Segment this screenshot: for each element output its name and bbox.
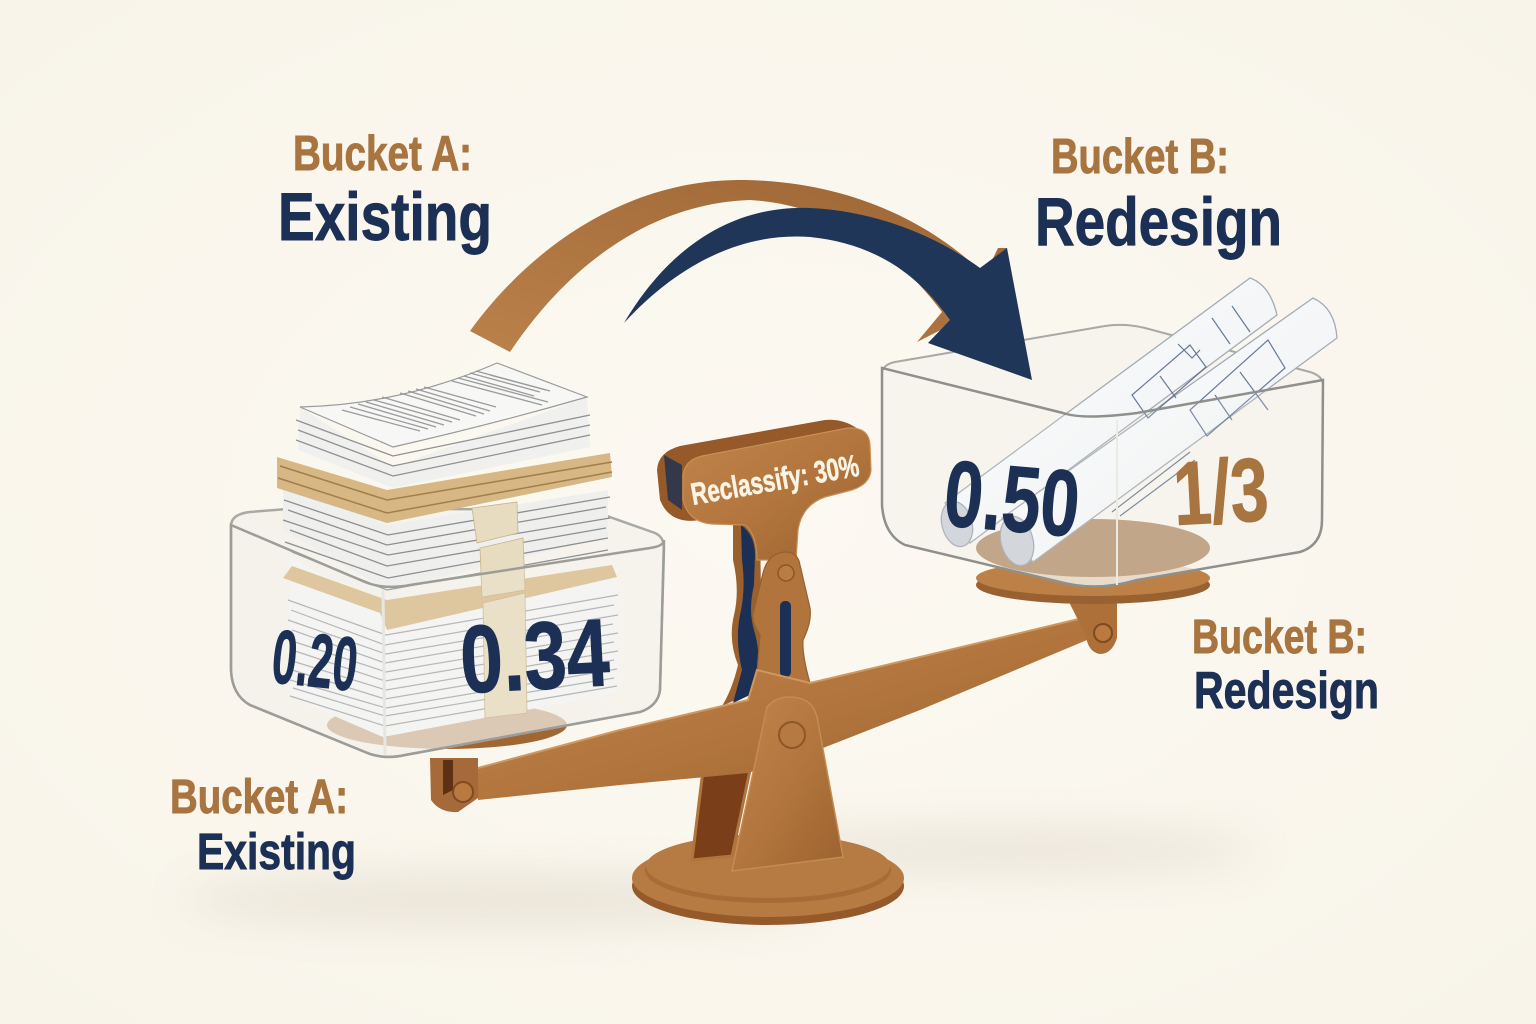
value: 0.34: 0.34 — [457, 599, 612, 714]
heading: Bucket B Redesign: Bucket B: — [1051, 130, 1229, 184]
scale — [430, 420, 1117, 925]
right pan — [976, 560, 1210, 604]
scale beam — [478, 617, 1087, 800]
label: Reclassify 30%: Reclassify: 30% — [688, 448, 862, 512]
blueprints — [937, 278, 1337, 569]
top sheet — [300, 363, 587, 447]
brown residue — [976, 519, 1210, 577]
ground shadows — [180, 830, 1260, 924]
left hanger — [430, 758, 478, 812]
middle paper block — [283, 480, 610, 590]
scale slot — [780, 601, 791, 677]
value: 0.50: 0.50 — [940, 440, 1084, 557]
bin: left glass front — [231, 525, 664, 757]
scale rear leg — [692, 770, 750, 860]
post backing with navy strip — [722, 522, 762, 706]
bin: right glass front — [882, 368, 1323, 587]
value: 1/3: 1/3 — [1171, 440, 1271, 545]
scale main pivot — [779, 722, 805, 748]
bin: left glass back — [231, 508, 664, 757]
label: Bucket A Existing: Existing — [197, 823, 356, 880]
upper paper block — [296, 397, 590, 488]
lower paper block — [288, 557, 618, 737]
label: Bucket B Redesign: Redesign — [1194, 662, 1379, 720]
heading: Bucket B Redesign — [1035, 130, 1282, 260]
kraft folder layers — [277, 453, 612, 523]
blueprint roll front — [995, 298, 1337, 569]
label: Bucket A Existing: Bucket A: — [170, 771, 348, 824]
blueprint roll rear — [937, 278, 1277, 550]
label: Bucket B Redesign — [1192, 611, 1379, 720]
value: 0.20: 0.20 — [268, 614, 362, 708]
label: Bucket A Existing — [170, 771, 356, 880]
arrow: bronze arc — [470, 180, 1007, 352]
heading: Bucket A Existing: Existing — [278, 179, 492, 255]
heading: Bucket A Existing — [278, 127, 492, 255]
top sheet lines — [342, 371, 550, 431]
binding bands — [472, 502, 527, 718]
scale upper pivot — [778, 565, 794, 581]
arrow: navy curved arrow — [624, 208, 1032, 380]
right hanger — [1068, 600, 1117, 654]
scale base — [632, 834, 904, 925]
plaque and post front — [683, 428, 871, 560]
label: Bucket B Redesign: Bucket B: — [1192, 611, 1367, 664]
lower kraft sheet — [283, 565, 617, 630]
left pan — [327, 701, 567, 749]
scale stand — [732, 697, 843, 871]
blueprint line drawings — [1112, 306, 1285, 516]
heading: Bucket B Redesign: Redesign — [1035, 184, 1282, 260]
plaque backing — [657, 420, 862, 521]
bin: right glass back — [882, 325, 1323, 587]
scale pivot plate — [753, 552, 810, 683]
paper stack — [277, 363, 618, 737]
heading: Bucket A Existing: Bucket A: — [293, 127, 472, 181]
